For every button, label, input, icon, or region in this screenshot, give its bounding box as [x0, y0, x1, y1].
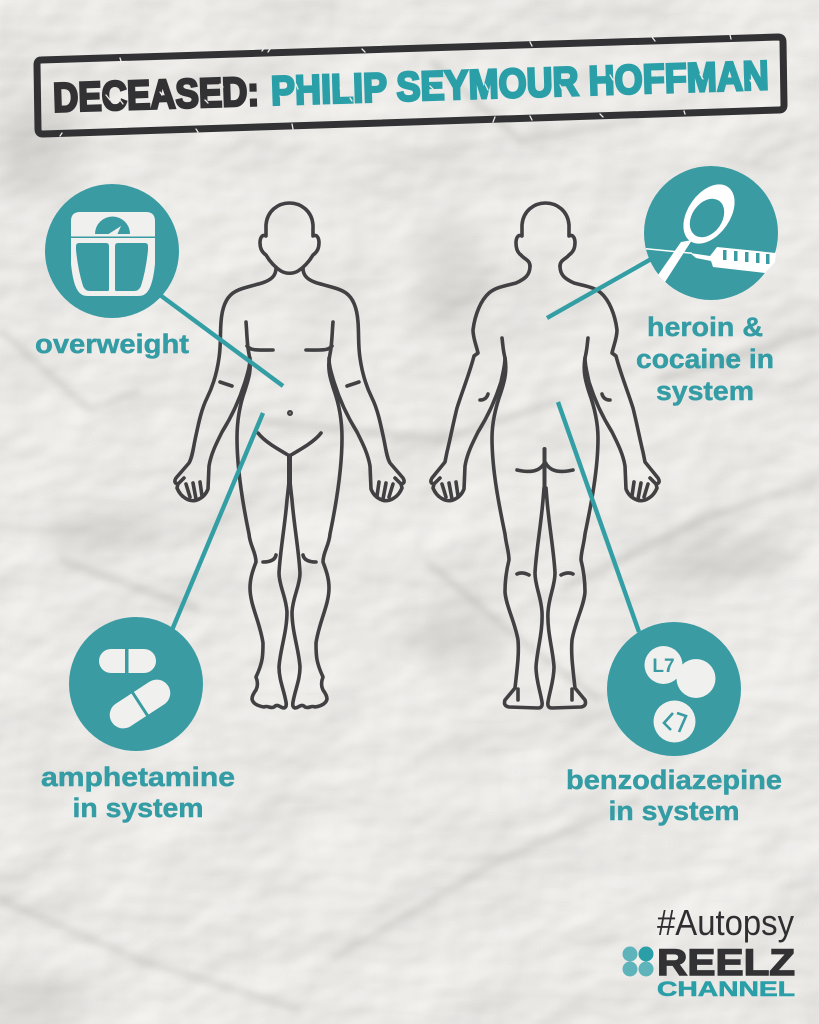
title text [52, 52, 769, 121]
right half of back [546, 266, 659, 708]
label: overweight: overweight [35, 329, 189, 359]
back marks [480, 394, 529, 700]
label: heroin & cocaine in system [636, 312, 774, 406]
back head [516, 203, 575, 266]
label: heroin & cocaine in system: heroin & [647, 312, 763, 342]
right half of body (mirror) [290, 268, 404, 708]
callout: heroin and cocaine [636, 166, 778, 406]
figure: body front [175, 203, 404, 708]
branding [622, 902, 795, 1001]
callout: overweight [35, 184, 189, 359]
left half of body [175, 268, 289, 708]
callout: benzodiazepine [566, 622, 782, 826]
icon: spoon and syringe [644, 166, 778, 300]
connector lines [160, 254, 660, 632]
label: amphetamine in system: amphetamine [41, 762, 235, 792]
label: benzodiazepine in system [566, 765, 782, 826]
REELZ wordmark: REELZ [657, 941, 795, 983]
logo dots [622, 946, 654, 976]
hashtag: #Autopsy [657, 902, 794, 943]
glute lines [517, 462, 573, 471]
label: heroin & cocaine in system: cocaine in [636, 344, 774, 374]
left fingers of back figure [442, 482, 458, 499]
title distress marks [60, 35, 752, 136]
icon: bathroom scale [45, 184, 179, 318]
spine lower line [542, 449, 546, 492]
title stamp [37, 35, 784, 136]
icon: capsules [69, 617, 203, 751]
title text: DECEASED: [52, 68, 260, 121]
label: heroin & cocaine in system: system [656, 376, 754, 406]
CHANNEL wordmark: CHANNEL [657, 978, 795, 1001]
label: amphetamine in system [41, 762, 235, 823]
label: benzodiazepine in system: in system [608, 796, 740, 826]
icon: tablets [607, 622, 741, 756]
icon: tablets: L7 [652, 656, 675, 677]
label: benzodiazepine in system: benzodiazepine [566, 765, 782, 795]
left leg and torso of back [492, 338, 544, 708]
left half of back [431, 266, 530, 501]
title border [37, 37, 784, 134]
callout: amphetamine [41, 617, 235, 823]
front head [260, 203, 319, 273]
figure: body back [431, 203, 659, 708]
label: amphetamine in system: in system [72, 793, 204, 823]
crotch line and navel [287, 456, 292, 490]
